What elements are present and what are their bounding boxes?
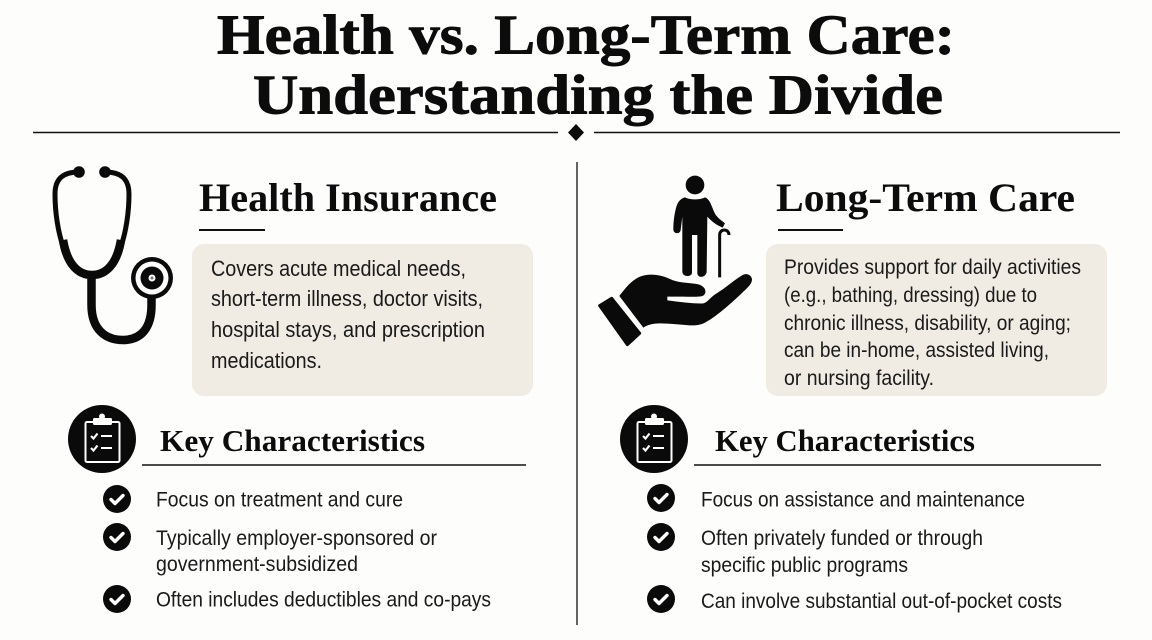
item: funding: specific public programs [701,554,908,577]
item: costs: Often includes deductibles and co-pays [156,588,491,612]
description box: health insurance: short-term illness, doctor visits, [211,286,483,311]
item: costs: Can involve substantial out-of-pocket costs [701,590,1062,613]
checklist: long-term care [647,484,1062,613]
description box: health insurance: Covers acute medical needs, [211,256,466,281]
item: funding: Typically employer-sponsored or [156,527,437,550]
description box: long-term care: or nursing facility. [784,367,934,390]
heading: key characteristics: Key Characteristics [160,423,425,458]
item: funding: government-subsidized [156,553,358,576]
title: Understanding the Divide [253,64,943,126]
icon: clipboard checklist [620,405,688,473]
item: funding [103,523,437,576]
heading: key characteristics: Key Characteristics [715,423,975,458]
heading: health insurance: Health Insurance [199,175,497,220]
description box: long-term care: chronic illness, disability, or aging; [784,312,1071,335]
item: funding: Often privately funded or through [701,527,983,550]
item: treatment: Focus on treatment and cure [156,488,403,512]
icon: clipboard checklist [68,405,136,473]
checklist: health insurance [103,485,491,613]
title [217,4,955,126]
description box: long-term care: (e.g., bathing, dressing) due to [784,284,1037,307]
item: treatment [103,485,403,513]
panel: health insurance [55,166,533,613]
icon: header diamond [568,124,584,141]
description box: long-term care: Provides support for daily activities [784,256,1081,279]
description box: health insurance: medications. [211,348,322,373]
description box: long-term care [766,244,1107,396]
heading: long-term care: Long-Term Care [776,175,1075,220]
item: funding [647,523,983,577]
item: assistance [647,484,1025,512]
item: assistance: Focus on assistance and maintenance [701,488,1025,512]
item: costs [647,585,1062,613]
description box: health insurance [192,244,533,396]
item: costs [103,585,491,613]
icon: hand holding elderly person [600,176,752,345]
title: Health vs. Long-Term Care: [217,4,955,66]
panel: long-term care [600,175,1107,613]
description box: long-term care: can be in-home, assisted living, [784,339,1049,362]
description box: health insurance: hospital stays, and prescription [211,317,485,342]
icon: stethoscope [55,166,173,340]
